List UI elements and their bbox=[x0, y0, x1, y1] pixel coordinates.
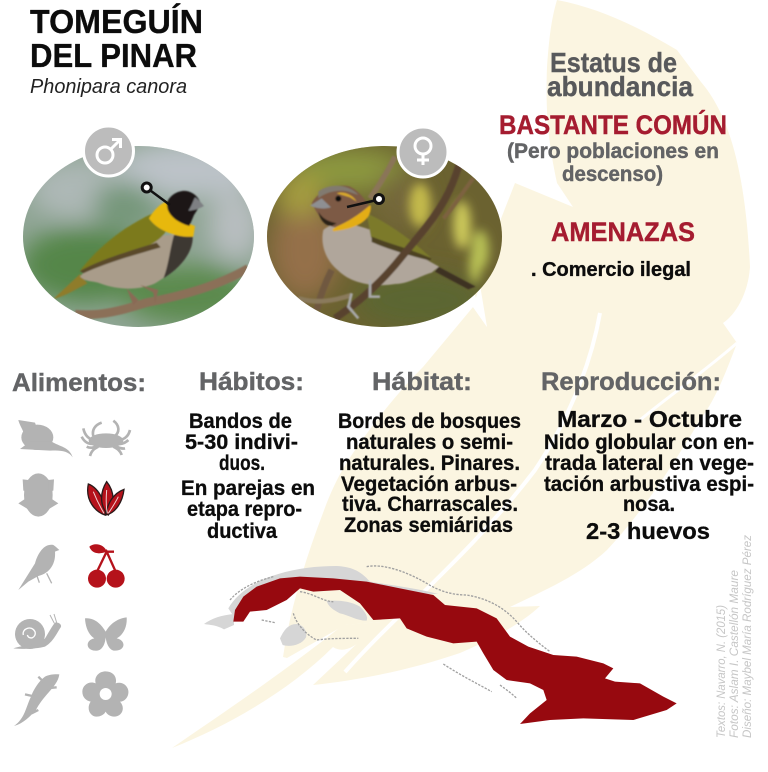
diet icons bbox=[13, 420, 130, 726]
column: Reproducción: trada lateral en vege- bbox=[545, 452, 754, 475]
title bbox=[30, 3, 203, 98]
column: Reproducción bbox=[541, 368, 754, 544]
title: DEL PINAR bbox=[30, 37, 197, 74]
column: Hábitat: Hábitat: bbox=[372, 368, 472, 396]
column: Hábitos: Bandos de bbox=[189, 410, 292, 433]
map: shelf and keys in grey bbox=[204, 566, 438, 646]
status block: Estatus de bbox=[550, 47, 677, 78]
status block: abundancia bbox=[547, 71, 693, 102]
column: Reproducción: Reproducción: bbox=[541, 368, 721, 396]
column: Hábitos: Hábitos: bbox=[199, 368, 304, 396]
pointer: male collar bbox=[142, 183, 170, 205]
threats block: AMENAZAS bbox=[551, 217, 695, 247]
icon: crab bbox=[82, 421, 130, 456]
status block bbox=[499, 47, 727, 186]
column: Hábitat: tiva. Charrascales. bbox=[342, 493, 518, 516]
column: Hábitos bbox=[181, 368, 315, 543]
threats block: . Comercio ilegal bbox=[531, 258, 691, 281]
status block: descenso) bbox=[562, 163, 663, 186]
icon: seeds bbox=[88, 482, 124, 515]
icon: snail bbox=[13, 614, 61, 649]
icon: butterfly bbox=[85, 617, 127, 651]
status block: (Pero poblaciones en bbox=[507, 140, 719, 163]
column: Hábitat: naturales o semi- bbox=[346, 431, 513, 454]
column: Hábitat: Vegetación arbus- bbox=[341, 473, 517, 496]
column: Hábitos: 5-30 indivi- bbox=[185, 431, 298, 454]
title: Phonipara canora bbox=[30, 76, 187, 98]
background feather bbox=[172, 0, 750, 748]
column: Hábitat: Zonas semiáridas bbox=[344, 514, 513, 537]
photo: male bird bbox=[20, 140, 261, 330]
map: scattered coastal keys bbox=[230, 566, 550, 698]
icon: cherries bbox=[88, 544, 125, 588]
icon: lizard bbox=[14, 674, 59, 726]
column: Hábitat: Bordes de bosques bbox=[338, 410, 521, 433]
column: Hábitat bbox=[338, 368, 521, 537]
column: Reproducción: nosa. bbox=[623, 493, 675, 516]
pointer: female collar bbox=[347, 194, 384, 207]
photo: female bird bbox=[267, 146, 502, 327]
column: Hábitos: ductiva bbox=[207, 520, 277, 543]
column: Reproducción: tación arbustiva espi- bbox=[544, 473, 754, 496]
credits: Diseño: Maybel María Rodríguez Pérez bbox=[742, 535, 754, 738]
column: Hábitat: naturales. Pinares. bbox=[339, 452, 520, 475]
column: Reproducción: 2-3 huevos bbox=[586, 518, 710, 544]
column: Reproducción: Marzo - Octubre bbox=[557, 406, 742, 432]
credits: Textos: Navarro, N. (2015) bbox=[716, 605, 728, 738]
map of Cuba bbox=[204, 566, 677, 724]
column: Reproducción: Nido globular con en- bbox=[544, 431, 754, 454]
icon: female symbol badge bbox=[398, 127, 448, 177]
title: TOMEGUÍN bbox=[30, 3, 203, 40]
icon: frog bbox=[18, 473, 58, 517]
column: Hábitos: En parejas en bbox=[181, 477, 315, 500]
column: Hábitos: etapa repro- bbox=[187, 498, 302, 521]
status block: BASTANTE COMÚN bbox=[499, 109, 727, 140]
icon: male symbol badge bbox=[84, 126, 134, 176]
column: Hábitos: duos. bbox=[219, 452, 265, 475]
icon: flower bbox=[82, 671, 128, 717]
threats block bbox=[531, 217, 695, 281]
heading: Alimentos: Alimentos: bbox=[12, 369, 146, 397]
credits bbox=[716, 535, 754, 738]
icon: rodent bbox=[18, 420, 73, 457]
map: distribution area in red bbox=[233, 577, 677, 724]
icon: small bird bbox=[18, 545, 59, 590]
credits: Fotos: Aslam I. Castellón Maure bbox=[729, 570, 741, 738]
